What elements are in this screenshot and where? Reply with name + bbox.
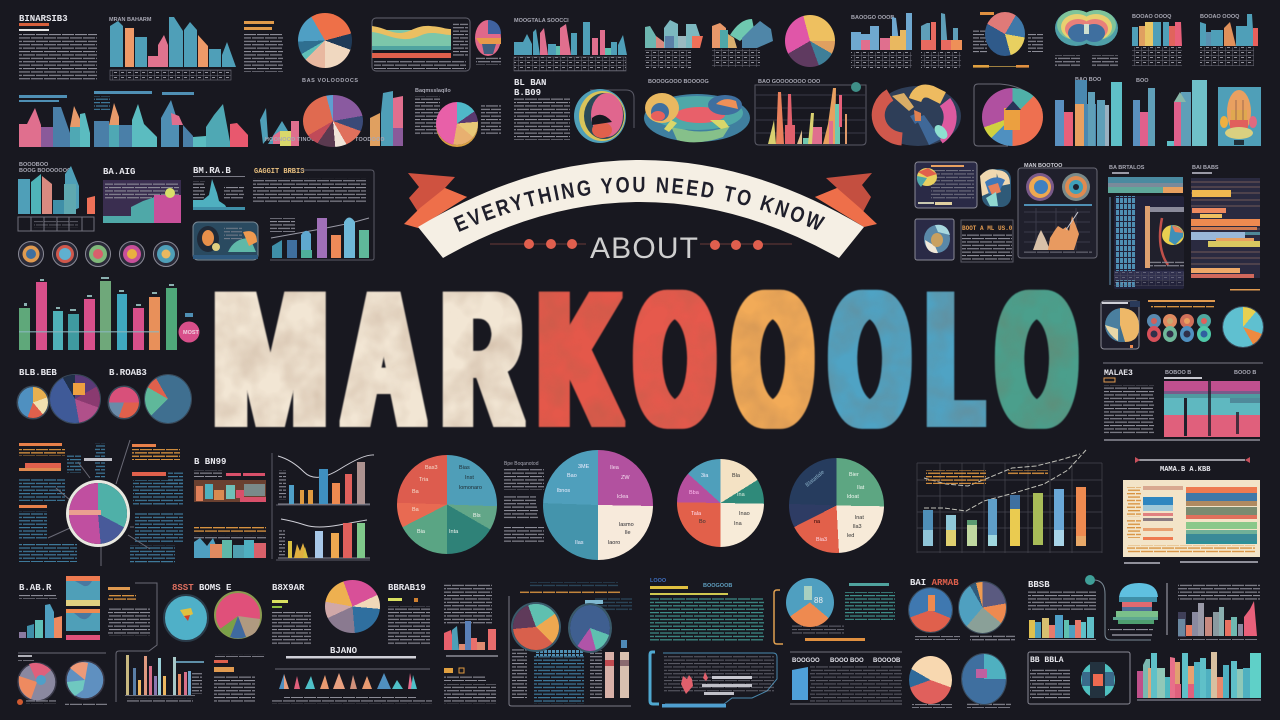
pie: oval 1 xyxy=(909,588,952,632)
text block with orange heading xyxy=(244,21,283,72)
chart: skyline J xyxy=(1132,14,1182,66)
title: MARKOOOLO: A xyxy=(344,254,423,464)
ribbon text: EVERYTHING YOU NEED TO KNOW xyxy=(453,176,826,232)
pie: big 3: Ina xyxy=(734,521,742,527)
pie: big 1: Inta xyxy=(449,529,458,535)
icon: face blob xyxy=(475,20,501,65)
heading: BL BAN xyxy=(514,78,546,88)
pie: bottom centre xyxy=(325,580,380,633)
chart: bowl shape: BOOOGOOO BOOOOG xyxy=(648,79,709,85)
pie: big 1: Ba xyxy=(412,507,419,513)
chart: bottom right colorful bars xyxy=(1137,652,1261,701)
subheading: ABOUT with dots xyxy=(490,232,792,265)
subheading: ABOUT with dots: ABOUT xyxy=(590,232,698,265)
panel: list with cross circle xyxy=(1028,652,1130,704)
ribbon banner xyxy=(404,160,877,258)
pie: big 1 xyxy=(397,455,497,554)
chart: big bar chart: MOST xyxy=(183,330,200,336)
chart: tall bars N xyxy=(1133,78,1207,146)
pie: dashboard left xyxy=(513,604,559,650)
pie: oval 4 xyxy=(962,654,1006,704)
pie: big 3 xyxy=(677,459,764,547)
panel: purple text with pink block xyxy=(103,167,181,223)
chart: frame with spike bars xyxy=(755,79,866,145)
pie: big 2: Ilas xyxy=(575,540,584,546)
radial diagram text xyxy=(19,440,183,566)
icon grid: eight round charts xyxy=(1147,300,1215,342)
panel: top-left text block xyxy=(19,14,97,80)
heading xyxy=(514,78,546,98)
pie: top row blue xyxy=(985,12,1025,56)
chart: skyline G: BAOOGO OOOB xyxy=(851,15,894,21)
pie: big 1: Tria xyxy=(419,477,428,483)
chart: big bar chart xyxy=(19,277,200,350)
pie: big 4: Blatatlale xyxy=(805,469,826,489)
pie: big 4: ldoat xyxy=(847,494,859,500)
text: green rows: LOOO xyxy=(650,578,667,584)
panel: circles and orange area: MAN BOOTOO xyxy=(1024,163,1063,169)
panel: blue table with frame xyxy=(1108,165,1184,289)
chart: top row F xyxy=(712,19,773,67)
chart: bars with trend bottom xyxy=(278,519,370,558)
pie: big 1: Bas3 xyxy=(425,465,438,471)
pie: big 1: Bias xyxy=(459,465,470,471)
text block beside pie: Baqmsslaqilo xyxy=(415,88,451,94)
ribbon right wing xyxy=(815,173,877,227)
panel: cream table xyxy=(1123,457,1260,564)
pie: purple large xyxy=(50,375,100,423)
pie: big 2: lclea xyxy=(617,494,628,500)
panel: top right card 1 xyxy=(915,162,1011,208)
heading: BAI ARMAB xyxy=(910,578,959,588)
panel: pie with card xyxy=(1101,301,1140,349)
panel: chart with curl: BBSB xyxy=(1028,580,1050,590)
chart: skyline J: BOOAO OOOQ xyxy=(1132,14,1172,20)
title: MARKOOOLO: M xyxy=(213,254,327,464)
pie: big 3: Bo xyxy=(699,519,706,525)
pie: dashboard right xyxy=(570,605,610,651)
pie: row two centre xyxy=(303,95,363,147)
chart: concentric rings xyxy=(574,89,634,143)
chart: skyline bars 2 xyxy=(514,18,627,71)
panel: red and pink table: BOOO B xyxy=(1234,370,1256,376)
chart: two round charts xyxy=(164,592,261,641)
pie: big 1: Bia xyxy=(417,529,425,535)
pie: big 2: ZW xyxy=(621,475,630,481)
ribbon left wing xyxy=(404,173,467,228)
panel: red and pink table: BOBOO B xyxy=(1165,370,1191,376)
panel: top-left text block: BINARSIB3 xyxy=(19,14,68,24)
table with blue bars: BOOO BOO xyxy=(830,658,864,664)
chart: skyline with central pie: HOONOOD TINOOG xyxy=(265,137,320,143)
pie: big 4: Bier xyxy=(849,472,859,478)
pie: big 4: led xyxy=(847,533,854,539)
panel: horizontal bars: BAI BABS xyxy=(1192,165,1219,171)
chart: area bars A xyxy=(19,95,90,147)
pie: big 3: Ina xyxy=(737,492,745,498)
chart: tall thin bars xyxy=(125,655,204,703)
pie: bottom mid with orange: 88 xyxy=(814,596,823,605)
chart: skyline bars 2: MOOGTALA SOOCCI xyxy=(514,18,569,24)
chart: tall bars N: BOO xyxy=(1136,78,1149,84)
table with blue bars: BOOGOO xyxy=(792,658,820,664)
pie: big 3: Bla xyxy=(732,473,740,479)
chart: left mid skyline: BOOG BOOOOOOO xyxy=(19,168,72,174)
heading with text block xyxy=(272,583,311,646)
pie: big 2: lle xyxy=(625,530,631,536)
text and skyline xyxy=(444,584,498,657)
pie: radial hub xyxy=(69,483,127,544)
pie: big 2: 3ME xyxy=(578,464,589,470)
pie: big 4: na xyxy=(814,519,820,525)
chart: area bars C xyxy=(161,92,248,147)
panel: frame with text and bars: GAGGIT BRBIS xyxy=(254,168,304,176)
chart: frame with spike bars: BAO GOOOOOOO OOO xyxy=(758,79,821,85)
chart: skyline bars 1 xyxy=(109,17,236,80)
chart: triangle peaks: BJANO xyxy=(330,646,358,656)
pie: big 4: Ilat xyxy=(857,485,864,491)
icon row: five round charts xyxy=(18,242,178,266)
pie: big 3: Tala xyxy=(691,511,701,517)
panel: circles and orange area xyxy=(1018,163,1097,258)
chart: small skyline: BM.RA.B xyxy=(193,166,231,176)
icon: dome stack xyxy=(1108,583,1158,636)
panel: pie in dark card xyxy=(915,219,954,260)
panel: red and pink table: MALAE3 xyxy=(1104,369,1133,378)
pie: big 1: Bls xyxy=(473,513,481,519)
panel: blue table with frame: BA BRTALOS xyxy=(1109,165,1145,171)
heading with text block: BBRAB19 xyxy=(388,583,426,593)
pie: row two right xyxy=(436,102,478,145)
pie: big 4: lla3 xyxy=(853,524,862,530)
pie: big 2: lasmo xyxy=(619,522,634,528)
panel: cream table: MAMA.B A.KBB xyxy=(1160,466,1211,474)
text block xyxy=(214,654,265,703)
panel: red and pink table xyxy=(1103,363,1263,441)
divider xyxy=(272,453,370,560)
chart: skyline with central pie: TOODOOD xyxy=(355,137,385,143)
panel: dashboard with two circles xyxy=(509,582,632,706)
pie: frame circle xyxy=(982,88,1043,146)
pie: big 4: Bia3 xyxy=(816,537,827,543)
icon: rocket panel xyxy=(1218,87,1261,146)
chart: right bottom bars xyxy=(1167,583,1260,640)
heading: B.ROAB3 xyxy=(109,368,147,378)
panel: wave area chart xyxy=(372,18,470,71)
pie: big 4 xyxy=(789,458,884,553)
title: MARKOOOLO: O xyxy=(734,254,811,464)
chart: area bars B xyxy=(94,91,157,147)
panel: text card: BOOT A ML US.0 xyxy=(962,225,1013,232)
pie: oval 3 xyxy=(909,656,952,704)
pie: pink xyxy=(109,387,139,418)
text block between pies xyxy=(504,461,544,542)
chart: skyline K: BOOAO OOOQ xyxy=(1200,14,1240,20)
pie: big 1: Inst xyxy=(465,475,474,481)
text block between pies: Bpe Boqanotod xyxy=(504,461,539,467)
panel: horizontal bars xyxy=(1191,165,1260,290)
chart: skyline bars 1: MRAN BAHARM xyxy=(109,17,152,23)
title: MARKOOOLO: R xyxy=(443,254,520,465)
panel: rounded photo-like xyxy=(193,222,258,260)
pie: big 3: 3ia xyxy=(701,473,708,479)
text block xyxy=(444,668,496,704)
pie: big 2: Ilea xyxy=(610,465,619,471)
text around pie I xyxy=(973,12,1043,68)
heading: B BN99 xyxy=(194,457,226,467)
title: MARKOOOLO: L xyxy=(928,256,981,465)
chart: small skyline xyxy=(193,166,245,210)
text block beside pie xyxy=(415,88,501,135)
pie: big 2: Bao xyxy=(567,473,577,479)
title: MARKOOOLO xyxy=(213,253,1075,465)
pie: big 4: lnat xyxy=(855,515,864,521)
chart: top row E xyxy=(645,20,703,68)
text block with bracket xyxy=(108,583,157,702)
pie: circle left of row xyxy=(18,387,48,418)
chart: skyline G xyxy=(851,13,912,68)
panel: blue tech frame xyxy=(650,652,777,708)
panel: bottom-left chart and stack: B.AB.R xyxy=(19,583,52,593)
panel: list with cross circle: BB BBLA xyxy=(1030,656,1064,665)
pie: big 2 xyxy=(543,450,653,560)
panel: text card xyxy=(961,220,1013,262)
chart: tall bars M: BAO BOO xyxy=(1075,77,1102,83)
chart: skyline H xyxy=(921,13,962,68)
text: green rows: BOOGOOB xyxy=(703,583,732,589)
table with blue bars: BOOOOB xyxy=(873,658,901,664)
caption under pie: BAS VOLOODOCS xyxy=(302,78,359,84)
panel: bottom-left chart and stack xyxy=(19,576,100,640)
pie: big 3: Bba xyxy=(689,490,699,496)
chart: skyline K xyxy=(1200,14,1258,66)
title: MARKOOOLO: O xyxy=(831,254,908,464)
chart: bar chart with grid xyxy=(917,450,1102,553)
text: green rows xyxy=(650,578,764,642)
chart: left mid skyline xyxy=(18,162,95,231)
pie: top row donut xyxy=(785,15,835,67)
pie: big 2: lbnos xyxy=(557,488,570,494)
chart: tall bars M xyxy=(1055,77,1122,146)
pie: big 3: Inao xyxy=(739,511,750,517)
chart: circle in frame xyxy=(974,84,1042,146)
heading with text block xyxy=(388,583,430,646)
panel: chart with curl xyxy=(1028,575,1151,640)
text block xyxy=(514,98,570,140)
ribbon body xyxy=(418,160,864,258)
heading: BLB.BEB xyxy=(19,368,57,378)
text beside pie xyxy=(774,583,895,644)
pie: oval 2 xyxy=(959,582,1006,633)
title: MARKOOOLO: O xyxy=(636,254,713,464)
title: MARKOOOLO: K xyxy=(539,253,619,464)
pie: top row xyxy=(298,13,352,68)
table with blue bars xyxy=(790,652,902,704)
pie: blue with wedge xyxy=(145,375,191,423)
title: MARKOOOLO: O xyxy=(998,254,1075,464)
heading: 8SST BOMS E xyxy=(172,583,232,593)
pie: big 2: laoro xyxy=(608,540,620,546)
heading with text block: B8X9AR xyxy=(272,583,305,593)
chart: ring pie row2 xyxy=(875,86,961,146)
strip chart 1 xyxy=(194,470,266,502)
chart: skyline with central pie xyxy=(260,91,403,146)
pie: big 1: Ba xyxy=(412,489,419,495)
heading: B.B09 xyxy=(514,88,541,98)
pie: right panel xyxy=(1223,307,1263,347)
panel: purple text with pink block: BA.AIG xyxy=(103,167,135,177)
chart: rainbow shape xyxy=(1055,10,1118,68)
pie: bottom mid with orange xyxy=(786,578,834,627)
panel: lower-left two ovals xyxy=(17,653,107,705)
strip chart 2 xyxy=(194,527,266,558)
panel: frame with text and bars xyxy=(253,168,374,260)
chart: triangle peaks xyxy=(272,646,432,704)
captions under ovals xyxy=(912,635,1015,708)
chart: left mid skyline: BOOOBOO xyxy=(19,162,49,168)
chart: bowl shape xyxy=(644,79,750,142)
pie: big 1: lomonaro xyxy=(459,485,482,491)
chart: bars with trend top xyxy=(278,455,374,504)
